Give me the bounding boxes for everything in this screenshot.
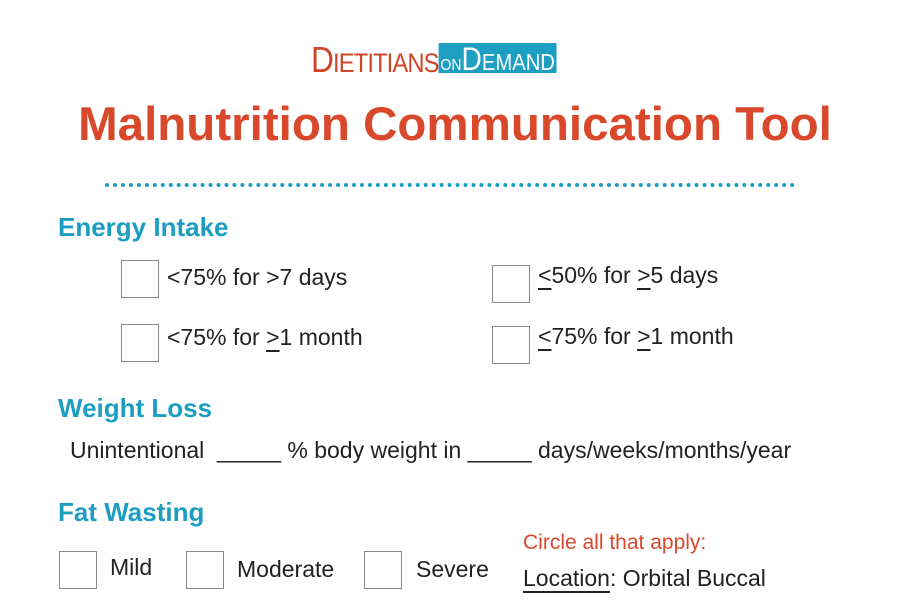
title: Malnutrition Communication Tool: [78, 98, 832, 151]
option 2: <75% for >1 month: [167, 324, 363, 350]
moderate: [186, 551, 334, 589]
mild: [59, 551, 152, 589]
option 2: [121, 324, 363, 362]
severe: Severe: [416, 556, 489, 582]
severe: [364, 551, 489, 589]
heading: Fat Wasting: Fat Wasting: [58, 497, 204, 527]
mild: Mild: [110, 554, 152, 580]
weight loss text: Unintentional _____ % body weight in _____ days/weeks/months/year: [70, 437, 791, 463]
heading: Energy Intake: Energy Intake: [58, 212, 229, 242]
moderate: Moderate: [237, 556, 334, 582]
option 1: <75% for >7 days: [167, 264, 347, 290]
option 4: [492, 323, 734, 364]
option 4: <75% for >1 month: [538, 323, 734, 349]
logo: DIETITIANS: [311, 39, 439, 80]
heading: Weight Loss: Weight Loss: [58, 393, 212, 423]
location: Location: Orbital Buccal: [523, 565, 766, 591]
circle instruction: Circle all that apply:: [523, 531, 706, 554]
option 3: [492, 262, 718, 303]
option 3: <50% for >5 days: [538, 262, 718, 288]
option 1: [121, 260, 347, 298]
logo: ONDEMAND: [440, 41, 555, 77]
divider dotted line: [105, 183, 795, 187]
logo: [311, 39, 557, 80]
